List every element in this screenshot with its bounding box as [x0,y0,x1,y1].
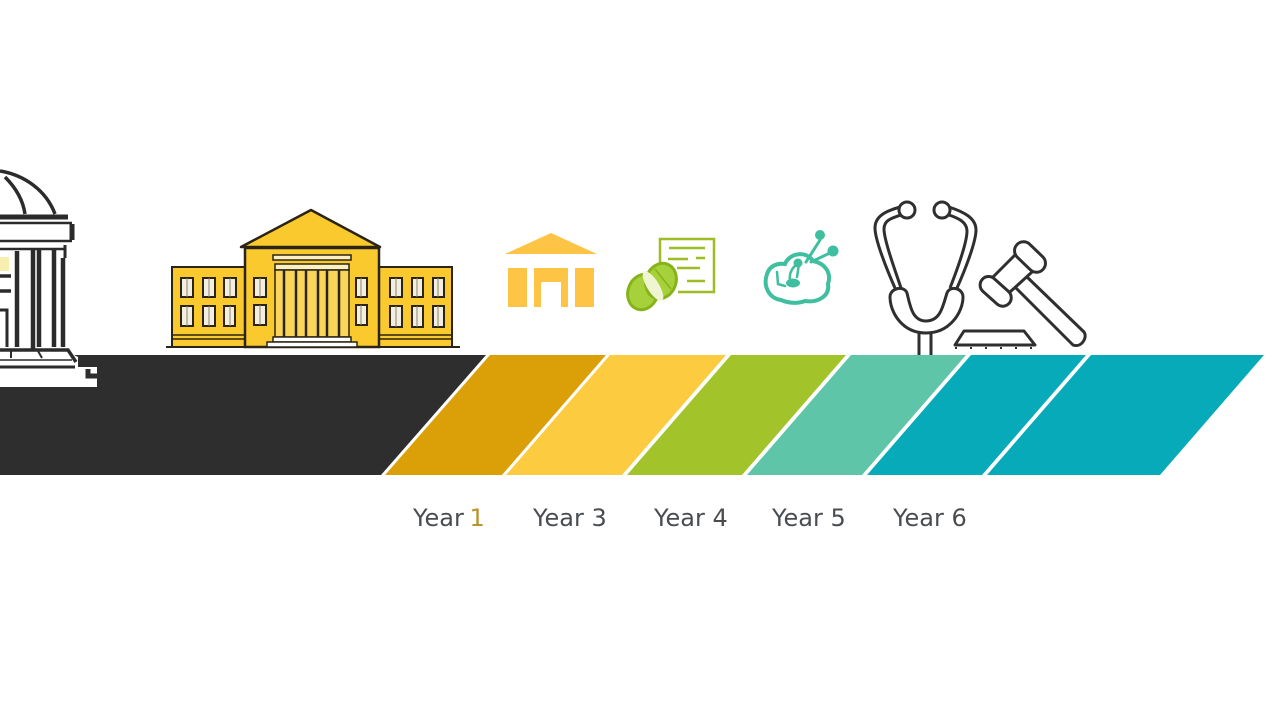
segment: dark base [0,355,486,475]
segment: yellow [506,355,726,475]
segment: gold [385,355,606,475]
windows [181,278,444,327]
pediment [241,210,380,247]
icon: small yellow institution [505,233,597,307]
segment: light teal [747,355,966,475]
central block [245,248,379,347]
portico [267,255,357,347]
icon: yellow university building [166,210,460,347]
label: Year 5: Year 5 [771,504,846,532]
icon: teal cloud molecule [766,230,838,303]
segment: teal wide [987,355,1264,475]
year labels [412,504,967,532]
gavel handle [1015,277,1085,346]
label: Year 4: Year 4 [653,504,728,532]
wing plinth lines [173,335,451,339]
icon: green document and capsule [623,239,714,314]
timeline band [0,355,1264,475]
capsule [623,259,681,314]
gavel head [1011,238,1049,276]
icon: gavel and sound block [955,238,1085,348]
icon: stethoscope [875,202,976,355]
right wing [379,267,452,347]
label: Year 6: Year 6 [892,504,967,532]
sound block [955,331,1035,345]
left wing [172,267,245,347]
ground line [166,346,460,348]
label: Year 1: Year 1 [412,504,485,532]
icon: domed capitol building [0,171,98,387]
segment: teal [867,355,1086,475]
document [660,239,714,292]
segment: green [627,355,846,475]
window mullions [187,278,438,327]
label: Year 3: Year 3 [532,504,607,532]
